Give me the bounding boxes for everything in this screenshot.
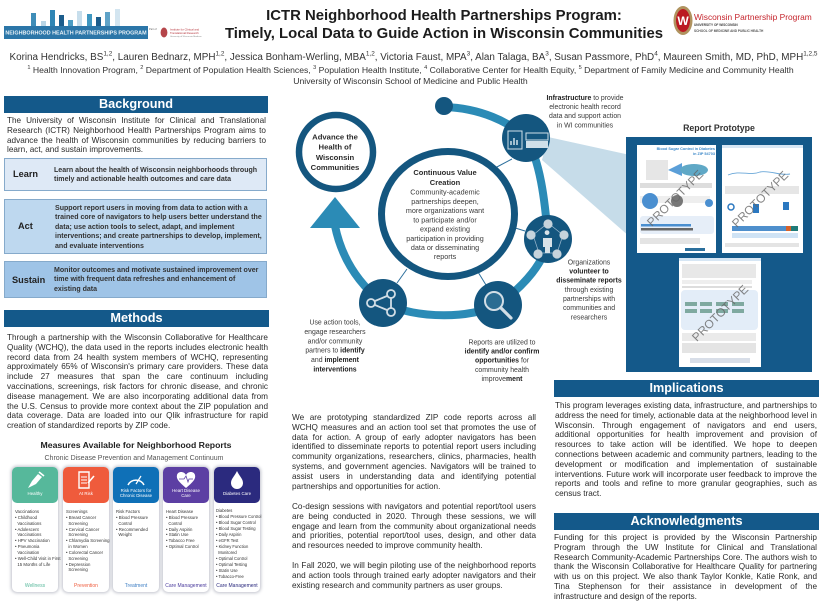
label: action tools: engage researchers [304, 329, 366, 336]
watermarks: PROTOTYPE [689, 282, 751, 344]
circle: Continuous Value Creation: reports [434, 252, 457, 261]
panel: Act: Support report users in moving from data to action with a [55, 205, 248, 212]
circle: Continuous Value Creation: to participate and/or [413, 216, 477, 224]
panel: Sustain: existing data [54, 286, 97, 293]
node: action tools share icon [359, 279, 407, 327]
card: Healthy: Vaccination [17, 550, 39, 555]
logo: Neighborhood Health Partnerships Program [4, 9, 148, 39]
card: Diabetes Care: • Tobacco-Free [216, 574, 244, 578]
text: prototyping description: We are prototyping standardized ZIP code reports across all [292, 413, 536, 422]
panel: Act: trained core of navigators to help users better understand the [55, 214, 262, 221]
card: At Risk: • Depression [66, 562, 90, 567]
text: acknowledgments: Research Community-Academic Partnerships Core. The authors wish to [554, 553, 817, 562]
text: co-design sessions: Co-design sessions with navigators and potential report/tool users [292, 502, 536, 511]
card: Heart Disease Care: Heart Disease [166, 509, 193, 514]
panel: Learn: timely and actionable health outcomes and care data [54, 176, 231, 183]
label: organizations: Organizations [568, 260, 611, 266]
logo: Wisconsin Partnership Program: W [677, 14, 689, 28]
cycle arc [335, 107, 548, 315]
label: organizations: volunteer to [569, 268, 609, 276]
card: Healthy: Wellness [25, 583, 45, 589]
card: Healthy: Healthy [28, 491, 42, 496]
text: acknowledgments: Funding for this project is provided by the Wisconsin Partnership [554, 533, 817, 542]
circle: Continuous Value Creation: Continuous Value [413, 168, 477, 177]
heading: Acknowledgments [554, 513, 819, 530]
card: At Risk: Screening [68, 567, 88, 572]
card: At Risk: Screening [68, 556, 88, 561]
label: infrastructure [546, 95, 624, 130]
label: opportunities: opportunities for [475, 358, 530, 364]
label: opportunities [465, 340, 539, 383]
text: implications: This program leverages existing data, infrastructure, and partnerships to [555, 401, 817, 410]
text: implications: address the need for timely, actionable data at the neighborhood level in [555, 411, 817, 420]
panel: Act [4, 199, 267, 254]
logo: Institute for Clinical and Translational Research [149, 27, 202, 38]
watermarks: PROTOTYPE [644, 167, 706, 229]
heading: Background: Background [99, 97, 173, 111]
logo: Wisconsin Partnership Program: Wisconsin Partnership Program [694, 12, 812, 22]
card: Heart Disease Care: • Blood Pressure [166, 515, 198, 520]
text: implications: reports and tools and refine to more granular geographies, such as [555, 479, 817, 488]
diagram: continuous value creation cycle [296, 94, 626, 383]
logo: Institute for Clinical and Translational Research: University of Wisconsin-Madison [170, 35, 202, 38]
card: Healthy: 15 Months of Life [17, 562, 50, 567]
arrow head [310, 197, 360, 228]
heading: Methods [4, 310, 269, 327]
panel: Act: and evaluate interventions [55, 243, 144, 250]
text: acknowledgments [554, 533, 817, 601]
logo: Wisconsin Partnership Program [674, 6, 812, 35]
logo: Neighborhood Health Partnerships Program: NEIGHBORHOOD HEALTH PARTNERSHIPS PROGRAM [5, 31, 147, 37]
panel: Sustain [4, 261, 267, 298]
card: At Risk: Screening [68, 532, 88, 537]
text: prototyping description: data for action. A group of early adopter navigators has been [292, 433, 536, 442]
circle: Continuous Value Creation: participation in providing [406, 234, 484, 243]
text: prototyping description: assist users in understanding data and identifying potential [292, 472, 536, 481]
card: At Risk: At Risk [79, 491, 93, 496]
panel: Learn: Learn about the health of Wisconsin neighborhoods through [54, 167, 257, 174]
panel: Learn [4, 158, 267, 191]
card: Risk Factors for Chronic Disease: Chronic Disease [120, 493, 152, 498]
label: action tools: interventions [313, 366, 357, 374]
label: action tools: and implement [311, 357, 360, 364]
report page 1 [637, 145, 716, 253]
label: infrastructure: data and support action [549, 113, 621, 120]
label: action tools: partners to identify [305, 348, 365, 354]
card: Risk Factors for Chronic Disease: • Recommended [116, 527, 148, 532]
card: Diabetes Care: • Daily Aspirin [216, 532, 241, 536]
title [225, 8, 663, 42]
heading: Implications [554, 380, 819, 397]
text: methods: Through a partnership with the Wisconsin Collaborative for Healthcare [7, 333, 268, 342]
card: Heart Disease Care: Care [181, 493, 191, 498]
circle: Continuous Value Creation [382, 152, 514, 276]
card: Diabetes Care: • eGFR Test [216, 538, 238, 542]
logo: Institute for Clinical and Translational Research: Institute for Clinical and [170, 28, 200, 32]
text: methods: approximately 65% of Wisconsin's primary care providers. These data [7, 362, 268, 371]
text: methods: creation of standardized reports by ZIP code. [7, 421, 170, 430]
heading: Methods: Methods [110, 311, 163, 325]
authors and affiliations: 1 Health Innovation Program, 2 Department of Population Health Sciences, 3 Population Health Institute, 4 Collaborative Center for Health Equity, 5 Department of Family Medicine and Community Health [27, 65, 794, 75]
circle: Continuous Value Creation: partnerships deepen, [411, 197, 479, 206]
heading: Acknowledgments: Acknowledgments [630, 514, 743, 528]
card: Heart Disease Care: • Daily Aspirin [166, 527, 192, 532]
text: implications: connections between academic and community partners, leading to the [555, 450, 817, 459]
heading: Measures Available for Neighborhood Reports: Measures Available for Neighborhood Reports [40, 440, 232, 450]
label: organizations: researchers [571, 314, 608, 322]
circle: Continuous Value Creation: data or disseminating [411, 243, 479, 252]
text: background intro [7, 116, 266, 154]
circle: Advance the Health of Wisconsin Communities: Advance the [312, 132, 359, 142]
card: Healthy: • Adolescent [15, 527, 39, 532]
panel: Act: Act [18, 221, 33, 231]
text: acknowledgments: thank the Wisconsin Collaborative for Healthcare Quality for partnering [554, 562, 817, 571]
label: organizations: communities and [563, 305, 615, 312]
card: At Risk: • Colorectal Cancer [66, 550, 103, 555]
watermarks: PROTOTYPE [729, 168, 791, 230]
text: methods: include 27 measures that span the care continuum including [7, 372, 268, 381]
card: At Risk: • Chlamydia Screening [66, 538, 110, 543]
text: methods: the U.S. Census to provide more context about the ZIP population and [7, 402, 268, 411]
heading: Implications: Implications [649, 381, 724, 395]
label: organizations: partnerships with [563, 296, 615, 303]
label: infrastructure: electronic health record [549, 104, 621, 111]
card: Diabetes Care: Diabetes [216, 508, 232, 512]
circle: Advance the Health of Wisconsin Communities [299, 115, 373, 189]
card: Diabetes Care [214, 467, 260, 592]
text: implications: census tract. [555, 489, 601, 498]
circle: Advance the Health of Wisconsin Communities: Communities [311, 163, 359, 172]
text: methods [7, 333, 268, 430]
text: methods: disease management. We are also incorporating additional data from [7, 392, 268, 401]
report page 1: in ZIP 54703 [693, 152, 715, 156]
watermarks [644, 167, 791, 344]
card: Healthy: Vaccinations [15, 509, 39, 514]
card: Heart Disease Care: Control [168, 521, 182, 526]
text: piloting: and action tools through trained early adopter navigators and their [292, 571, 536, 580]
text: background intro: advance the health of Wisconsin communities by reducing barriers to [7, 136, 266, 145]
node: infrastructure icon [502, 114, 550, 162]
label: organizations: disseminate reports [556, 278, 622, 284]
text: co-design sessions: are being conducted in 2020. Through these sessions, we will [292, 512, 536, 521]
report page 1: Blood Sugar Control in Diabetes [657, 147, 715, 151]
wedge linking infrastructure to report prototype [542, 137, 630, 237]
text: co-design sessions: and resources needed to improve community health. [292, 541, 483, 550]
text: implications [555, 401, 818, 498]
title: ICTR Neighborhood Health Partnerships Program: [266, 8, 622, 24]
card: Healthy [12, 467, 58, 592]
card: Diabetes Care: Diabetes Care [223, 491, 251, 496]
text: prototyping description: partnerships and opportunities for action. [292, 482, 440, 491]
label: action tools: Use action tools, [310, 320, 361, 326]
text: methods: vaccinations, screenings, risk factors for chronic disease, and chronic [7, 382, 268, 391]
heading: Report Prototype: Report Prototype [683, 123, 755, 133]
text: implications: Wisconsin. Through engagement of navigators and end users, [555, 421, 817, 430]
card: Diabetes Care: • Optimal Testing [216, 562, 247, 566]
card: At Risk: • Cervical Cancer [66, 527, 99, 532]
label: action tools [304, 320, 366, 374]
label: opportunities: identify and/or confirm [465, 348, 539, 356]
label: action tools: and/or community [308, 338, 363, 346]
panel: Sustain: time with frequent data refreshes and enhancement of [54, 276, 235, 283]
text: co-design sessions: and priorities, potential report/tool uses, design, and other data [292, 531, 536, 540]
card: At Risk: • Breast Cancer [66, 515, 96, 520]
logo: Institute for Clinical and Translational Research: Translational Research [170, 31, 199, 35]
label: organizations [556, 260, 622, 322]
label: opportunities: community health [475, 367, 529, 374]
panel: Learn: Learn [13, 169, 38, 179]
card: Diabetes Care: • Blood Pressure Control [216, 514, 261, 518]
card: Healthy: • HPV Vaccination [15, 538, 50, 543]
text: background intro: Research (ICTR) Neighborhood Health Partnerships Program aims to [7, 126, 266, 135]
panel: report prototype pages [626, 137, 812, 372]
report page 2 [722, 145, 803, 253]
connectors [397, 159, 525, 285]
text: prototyping description: systems, and government agencies. Navigators will be trained to [292, 462, 536, 471]
circle: Continuous Value Creation: Community-academic [410, 188, 480, 196]
card: At Risk: Prevention [74, 583, 98, 589]
text: prototyping description: WCHQ measures and an action tool set that promotes the use of [292, 423, 536, 432]
text: background intro: learn, act, and sustain improvements. [7, 145, 143, 154]
card: Risk Factors for Chronic Disease: Control [118, 521, 132, 526]
circle: Continuous Value Creation: more organizations want [406, 206, 484, 215]
card: Heart Disease Care [163, 467, 209, 592]
card: Diabetes Care: Care Management [216, 583, 258, 589]
subheading: continuum: Chronic Disease Prevention and Management Continuum [44, 455, 224, 462]
card: Diabetes Care: • Blood Sugar Control [216, 520, 256, 524]
logo: Wisconsin Partnership Program: UNIVERSITY OF WISCONSIN [694, 23, 738, 27]
text: co-design sessions: engage and learn from the community about organizational needs [292, 522, 536, 531]
card: Risk Factors for Chronic Disease: Weight [118, 532, 132, 537]
card: Healthy: • Childhood [15, 515, 37, 520]
card: At Risk: Screening [68, 521, 88, 526]
text: implications: resources to take action will be identified. We hope to deepen [555, 440, 817, 449]
card: Heart Disease Care: Care Management [165, 583, 207, 589]
text: background intro: The University of Wisconsin Institute for Clinical and Translational [7, 116, 266, 125]
start dot [435, 97, 453, 115]
text: prototyping description: community organizations, researchers, clinics, pharmacies, health [292, 452, 536, 461]
label: opportunities: Reports are utilized to [468, 340, 536, 346]
text: methods: data coverage. Data are loaded into our Qlik infrastructure for rapid [7, 411, 268, 420]
text: acknowledgments: Program through the UW Institute for Clinical and Translational [554, 543, 817, 552]
text: acknowledgments: infrastructure and design of the reports. [554, 592, 697, 601]
circle: Advance the Health of Wisconsin Communities: Wisconsin [316, 153, 354, 162]
card: Healthy: Vaccinations [17, 521, 41, 526]
authors and affiliations: University of Wisconsin School of Medicine and Public Health [293, 76, 528, 86]
card: Diabetes Care: • Optimal Control [216, 556, 247, 560]
node: people network icon [524, 215, 572, 263]
text: piloting [292, 561, 536, 590]
label: organizations: through existing [565, 287, 613, 294]
text: piloting: In Fall 2020, we will begin piloting use of the neighborhood reports [292, 561, 536, 570]
title: Timely, Local Data to Guide Action in Wisconsin Communities [225, 26, 663, 42]
text: acknowledgments: Tina Stephenson for their assistance in development of the [554, 582, 817, 591]
card: Diabetes Care: Monitored [218, 550, 237, 554]
card: At Risk: in Women [68, 544, 88, 549]
text: implications: interventions. Future work will incorporate user feedback to improve the [555, 470, 817, 479]
card: Heart Disease Care: • Tobacco Free [166, 538, 195, 543]
node: magnifier icon [474, 281, 522, 329]
label: opportunities: improvement [482, 376, 523, 383]
card: Heart Disease Care: • Statin Use [166, 532, 189, 537]
panel: Sustain: Monitor outcomes and motivate sustained improvement over [54, 267, 258, 274]
card: Risk Factors for Chronic Disease [113, 467, 159, 592]
panel: Sustain: Sustain [12, 275, 45, 285]
card: Diabetes Care: • Kidney Function [216, 544, 248, 548]
card: Healthy: Vaccinations [17, 532, 41, 537]
card: At Risk [63, 467, 109, 592]
card: Risk Factors for Chronic Disease: Risk Factors for [121, 488, 151, 493]
text: methods: Quality (WCHQ), the data used in the reports includes electronic health [7, 343, 268, 352]
circle: Continuous Value Creation: expand existing [420, 224, 470, 234]
text: prototyping description [292, 413, 536, 491]
circle: Advance the Health of Wisconsin Communities: Health of [319, 142, 352, 152]
text: prototyping description: identified to disseminate reports to potential report users including [292, 442, 536, 451]
label: infrastructure: Infrastructure to provide [546, 95, 624, 102]
card: Heart Disease Care: Heart Disease [172, 488, 200, 493]
authors and affiliations: Korina Hendricks, BS1,2, Lauren Bednarz, MPH1,2, Jessica Bonham-Werling, MBA1,2, Victoria Faust, MPA3, Alan Talaga, BA3, Susan Passmore, PhD4, Maureen Smith, MD, PhD, MPH1,2,5 [9, 51, 818, 63]
card: Healthy: • Well-Child Visit in First [15, 556, 61, 561]
card: Healthy: • Pneumonia [15, 544, 39, 549]
card: At Risk: Screenings [66, 509, 88, 514]
label: infrastructure: in WI communities [557, 122, 614, 130]
text: piloting: existing research and community partners as user groups. [292, 581, 503, 590]
text: acknowledgments: with us on this project. We also thank Taylor Konkle, Katie Ronk, and [554, 572, 817, 581]
text: implications: development or modification and implementation of sustainable [555, 460, 817, 469]
logo: Wisconsin Partnership Program: SCHOOL OF MEDICINE AND PUBLIC HEALTH [694, 29, 764, 33]
card: Risk Factors for Chronic Disease: Treatment [125, 583, 147, 589]
heading: Background [4, 96, 268, 113]
card: Diabetes Care: • Blood Sugar Testing [216, 526, 256, 530]
authors and affiliations [9, 51, 818, 86]
logo: Institute for Clinical and Translational Research: Part of [149, 27, 157, 31]
card: Diabetes Care: • Statin Use [216, 568, 238, 572]
panel: Act: interventions; and create partnerships to develop, implement, [55, 233, 262, 240]
card: Risk Factors for Chronic Disease: Risk Factors [116, 509, 140, 514]
text: co-design sessions [292, 502, 536, 550]
circle: Continuous Value Creation: Creation [430, 178, 461, 187]
text: implications: additional opportunities for health improvement and provision of [555, 430, 817, 439]
card: Risk Factors for Chronic Disease: • Blood Pressure [116, 515, 148, 520]
text: methods: record data from 24 health system members of WCHQ, representing [7, 353, 268, 362]
report page 3 [679, 258, 761, 367]
card: Heart Disease Care: • Optimal Control [166, 544, 199, 549]
panel: Act: data; use action tools to select, adapt, and implement [55, 224, 234, 231]
